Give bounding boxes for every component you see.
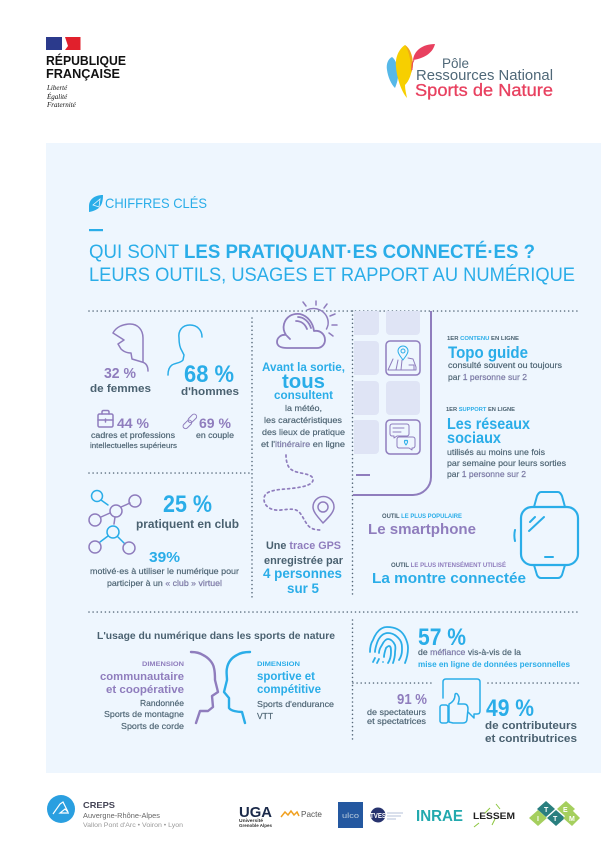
footer: logos partenaires bbox=[47, 795, 580, 829]
logo: LESSEM bbox=[473, 804, 515, 827]
stat: 91 % spectateurs: et spectatrices bbox=[367, 716, 426, 726]
stat: 91 % spectateurs: 91 % bbox=[397, 691, 427, 708]
dimension sportive: DIMENSION bbox=[257, 661, 300, 668]
stat: 39 % club virtuel bbox=[90, 549, 239, 588]
title: QUI SONT LES PRATIQUANT·ES CONNECTÉ·ES ? bbox=[89, 241, 535, 263]
stat: 57 %: mise en ligne de données personnelles bbox=[418, 659, 570, 669]
title: LEURS OUTILS, USAGES ET RAPPORT AU NUMÉRIQUE bbox=[89, 265, 575, 286]
stat: 32 % de femmes bbox=[90, 365, 151, 395]
dimension communautaire: Randonnée bbox=[140, 698, 184, 708]
logo: TVES: TVES bbox=[370, 813, 386, 820]
stat: 39 % club virtuel: motivé·es à utiliser le numérique pour bbox=[90, 566, 239, 576]
logo: UGA: Université bbox=[239, 818, 264, 823]
stat: réseaux sociaux: par 1 personne sur 2 bbox=[447, 469, 526, 479]
title bbox=[89, 229, 575, 286]
stat: 49 % contributeurs bbox=[485, 695, 577, 745]
text: consultent: des lieux de pratique bbox=[262, 427, 345, 437]
text: trace GPS: 4 personnes bbox=[263, 565, 342, 581]
section: profil femmes et hommes bbox=[90, 324, 239, 450]
logo: Pacte bbox=[281, 809, 322, 819]
section: usage du numérique bbox=[97, 631, 335, 731]
stat: topo guide: consulté souvent ou toujours bbox=[448, 360, 562, 370]
heading: chiffres clés: CHIFFRES CLÉS bbox=[105, 195, 207, 211]
dimension communautaire: Sports de montagne bbox=[104, 709, 184, 719]
stat: réseaux sociaux: sociaux bbox=[447, 430, 501, 447]
icon: profil violet bbox=[191, 652, 218, 723]
stat: smartphone: Le smartphone bbox=[368, 521, 476, 538]
logo: République française: FRANÇAISE bbox=[46, 67, 120, 81]
logo: Pôle Ressources National Sports de Nature bbox=[387, 44, 553, 100]
logo: ITEM: I bbox=[537, 816, 539, 823]
icon: montre connectée bbox=[514, 492, 578, 578]
stat: 69 % en couple bbox=[196, 415, 235, 440]
logo: ITEM: M bbox=[569, 816, 575, 823]
stat: 68 % d'hommes: d'hommes bbox=[181, 386, 239, 398]
stat: topo guide: Topo guide bbox=[448, 344, 528, 362]
stat: 57 % bbox=[418, 624, 570, 669]
logo: République française: Fraternité bbox=[46, 101, 77, 109]
stat: 49 % contributeurs: de contributeurs bbox=[485, 720, 577, 732]
section: téléphone bbox=[353, 311, 431, 495]
stat: 57 %: 57 % bbox=[418, 624, 466, 651]
icon: profil bleu bbox=[224, 652, 250, 723]
logo: UGA: Grenoble Alpes bbox=[239, 823, 273, 828]
logo: République française: Liberté bbox=[46, 84, 68, 92]
icon: empreinte digitale bbox=[370, 627, 408, 663]
logo: TVES bbox=[370, 808, 403, 822]
stat: topo guide: par 1 personne sur 2 bbox=[448, 372, 527, 382]
icon: femme bbox=[113, 324, 148, 371]
cadre du téléphone bbox=[353, 311, 431, 495]
tuiles d'application bbox=[354, 311, 420, 454]
stat: 25 % en club bbox=[136, 491, 239, 531]
stat: 69 % en couple: en couple bbox=[196, 431, 235, 440]
section: méfiance bbox=[370, 624, 570, 669]
icon: carte bbox=[386, 341, 420, 375]
stat: réseaux sociaux bbox=[446, 407, 566, 479]
icon: messages bbox=[386, 420, 420, 454]
stat: topo guide bbox=[447, 336, 562, 382]
stat: 49 % contributeurs: 49 % bbox=[486, 695, 534, 722]
text: consultent: la météo, bbox=[285, 403, 322, 413]
logo: République française: Égalité bbox=[46, 93, 68, 101]
stat: topo guide: 1ER CONTENU EN LIGNE bbox=[447, 336, 519, 342]
stat: 25 % en club: pratiquent en club bbox=[136, 519, 239, 531]
logo: ITEM bbox=[529, 801, 580, 826]
icon: mallette bbox=[98, 410, 113, 427]
dimension sportive: sportive et bbox=[257, 671, 315, 683]
stat: réseaux sociaux: 1ER SUPPORT EN LIGNE bbox=[446, 407, 515, 413]
text: consultent: les caractéristiques bbox=[264, 415, 342, 425]
logo: CREPS bbox=[47, 795, 183, 829]
dimension communautaire: communautaire bbox=[100, 671, 184, 683]
text: trace GPS: enregistrée par bbox=[264, 555, 344, 567]
text: trace GPS bbox=[263, 540, 344, 596]
section: pratique en club bbox=[89, 490, 239, 588]
dimension communautaire: Sports de corde bbox=[121, 721, 184, 731]
logo: ITEM: T bbox=[544, 807, 549, 814]
logo: LESSEM: LESSEM bbox=[473, 811, 515, 822]
stat: 25 % en club: 25 % bbox=[163, 491, 212, 518]
stat: réseaux sociaux: par semaine pour leurs sorties bbox=[447, 458, 566, 468]
dimension sportive: compétitive bbox=[257, 684, 321, 696]
logo: INRAE: INRAE bbox=[416, 808, 463, 825]
dimension communautaire: et coopérative bbox=[106, 684, 184, 696]
logo: CREPS: Auvergne-Rhône-Alpes bbox=[83, 811, 160, 820]
stat: montre: La montre connectée bbox=[372, 570, 526, 587]
stat: 44 % cadres bbox=[90, 415, 177, 450]
heading: usage: L'usage du numérique dans les sports de nature bbox=[97, 631, 335, 642]
icon: pouce et bulle bbox=[440, 679, 480, 723]
logo: ULCO bbox=[338, 802, 363, 828]
logo: CREPS: Vallon Pont d'Arc • Voiron • Lyon bbox=[83, 822, 183, 829]
logo: ITEM: T bbox=[553, 816, 558, 823]
stat: smartphone: OUTIL LE PLUS POPULAIRE bbox=[382, 514, 462, 520]
stat: 49 % contributeurs: et contributrices bbox=[485, 733, 577, 745]
logo: République française bbox=[46, 37, 126, 109]
icon: maillons bbox=[182, 413, 198, 430]
text: consultent bbox=[261, 362, 345, 449]
stat: 44 % cadres: cadres et professions bbox=[91, 431, 175, 440]
stat: 57 %: de méfiance vis-à-vis de la bbox=[418, 647, 521, 657]
icon: réseau bbox=[89, 490, 141, 554]
text: trace GPS: sur 5 bbox=[287, 580, 319, 596]
logo: ITEM: E bbox=[563, 807, 568, 814]
stat: 32 % de femmes: de femmes bbox=[90, 383, 151, 395]
stat: 68 % d'hommes bbox=[181, 361, 239, 398]
stat: 32 % de femmes: 32 % bbox=[104, 365, 136, 382]
logo: UGA: UGA bbox=[239, 804, 272, 821]
text: consultent: consultent bbox=[274, 390, 333, 402]
logo: Pacte: Pacte bbox=[301, 809, 322, 819]
text: consultent: tous bbox=[282, 371, 325, 393]
stat: montre bbox=[372, 561, 526, 587]
section: avant la sortie bbox=[0, 0, 345, 596]
logo: Pôle Ressources National Sports de Nature: Ressources National bbox=[416, 68, 553, 84]
panel: fond bleu clair bbox=[46, 143, 601, 773]
logo: ULCO: ulco bbox=[342, 811, 359, 820]
stat: 39 % club virtuel: participer à un « club » virtuel bbox=[107, 578, 222, 588]
stat: montre: OUTIL LE PLUS INTENSÉMENT UTILISÉ bbox=[391, 561, 506, 569]
stat: 91 % spectateurs: de spectateurs bbox=[367, 707, 426, 717]
stat: réseaux sociaux: Les réseaux bbox=[447, 416, 530, 433]
stat: réseaux sociaux: utilisés au moins une fois bbox=[447, 447, 545, 457]
dimension sportive: VTT bbox=[257, 711, 273, 721]
stat: 68 % d'hommes: 68 % bbox=[184, 361, 234, 388]
dimension communautaire: DIMENSION bbox=[142, 661, 184, 668]
text: consultent: et l'itinéraire en ligne bbox=[261, 439, 345, 449]
stat: 69 % en couple: 69 % bbox=[199, 415, 232, 431]
stat: 39 % club virtuel: 39% bbox=[149, 549, 180, 566]
logo: Pôle Ressources National Sports de Nature: Pôle bbox=[442, 55, 469, 71]
stat: 44 % cadres: 44 % bbox=[117, 415, 150, 431]
stat: 44 % cadres: intellectuelles supérieurs bbox=[90, 441, 177, 450]
logo: République française: RÉPUBLIQUE bbox=[46, 53, 126, 68]
dimension communautaire bbox=[100, 661, 184, 731]
icon: homme bbox=[168, 325, 202, 375]
dimension sportive bbox=[257, 661, 334, 721]
logo: CREPS: CREPS bbox=[83, 800, 115, 810]
text: trace GPS: Une trace GPS bbox=[266, 540, 341, 552]
logo: Pôle Ressources National Sports de Nature: Sports de Nature bbox=[415, 80, 553, 100]
stat: 91 % spectateurs bbox=[367, 691, 427, 726]
icon: itinéraire GPS bbox=[264, 455, 334, 530]
text: consultent: Avant la sortie, bbox=[262, 362, 345, 374]
dimension sportive: Sports d'endurance bbox=[257, 699, 334, 709]
icon: nuage et soleil bbox=[0, 0, 337, 348]
